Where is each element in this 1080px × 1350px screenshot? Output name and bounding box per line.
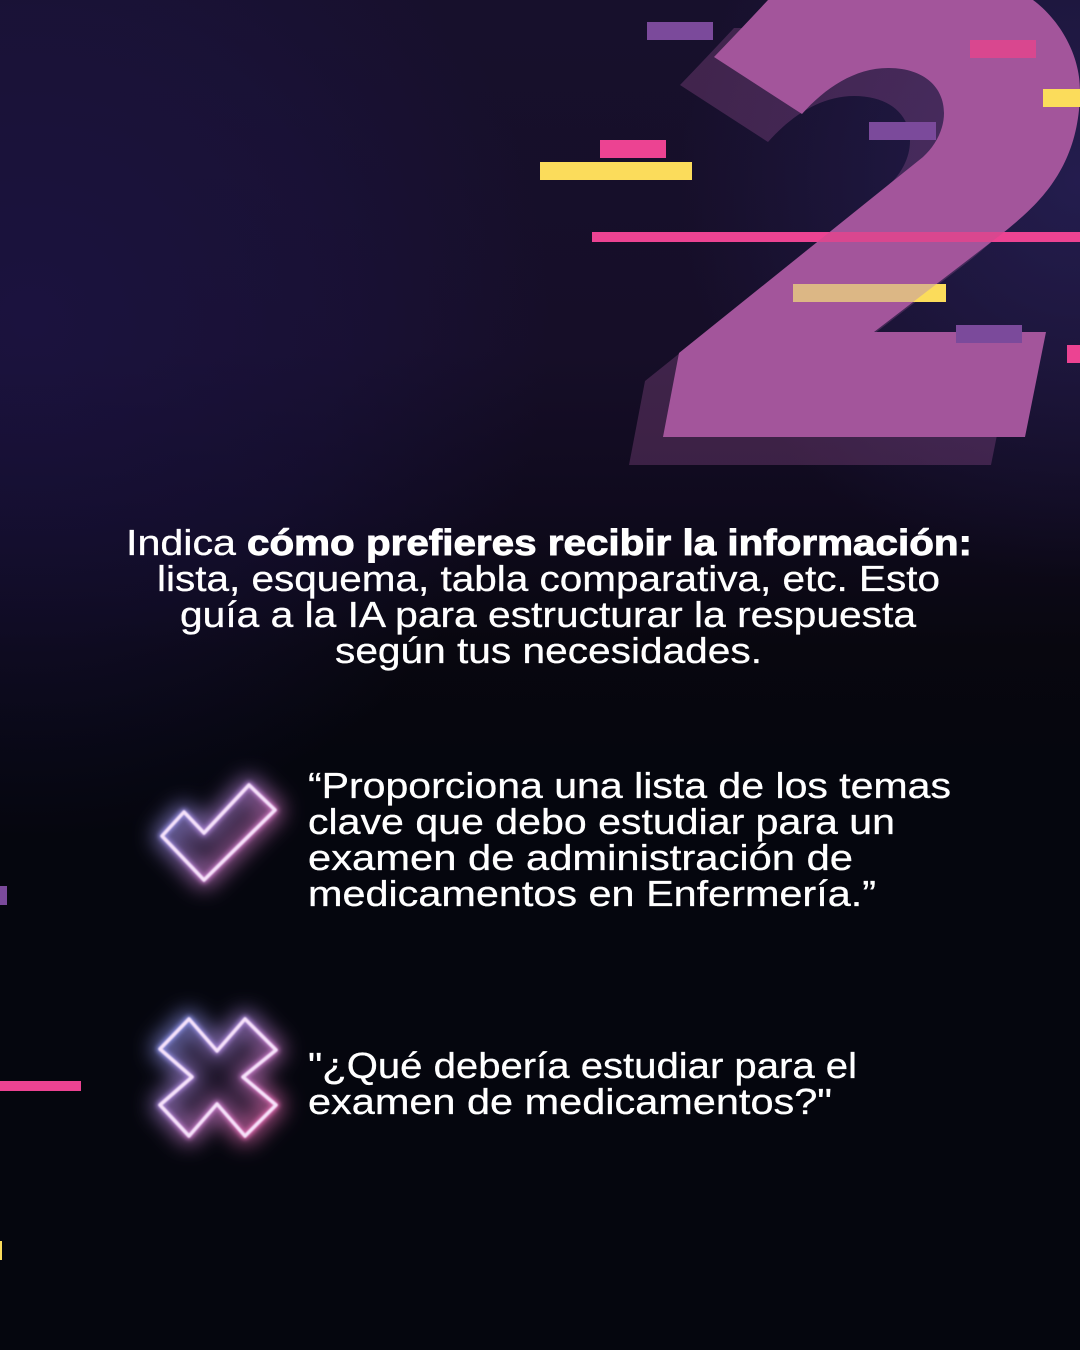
number 2 shadow [629,28,1046,465]
big number 2 [629,0,1080,465]
good prompt example: examen de administración de [308,837,853,878]
good prompt example: “Proporciona una lista de los temas [308,765,951,806]
glitch bars left edge [0,886,81,1260]
good prompt example: medicamentos en Enfermería.” [308,873,876,914]
number 2 face [663,0,1080,437]
bad prompt example: examen de medicamentos?" [308,1081,832,1122]
icon: neon cross [160,1019,276,1136]
intro paragraph [126,522,972,671]
intro paragraph: lista, esquema, tabla comparativa, etc. Esto [157,558,940,599]
glitch bars top [540,22,1080,363]
intro paragraph: cómo prefieres recibir la información: [247,522,972,563]
intro paragraph: Indica [126,522,237,563]
intro paragraph: según tus necesidades. [335,630,762,671]
bad prompt example [308,1045,857,1122]
bad prompt example: "¿Qué debería estudiar para el [308,1045,857,1086]
good prompt example: clave que debo estudiar para un [308,801,895,842]
intro paragraph: guía a la IA para estructurar la respuesta [180,594,917,635]
icon: neon check mark [162,785,275,880]
good prompt example [308,765,951,914]
